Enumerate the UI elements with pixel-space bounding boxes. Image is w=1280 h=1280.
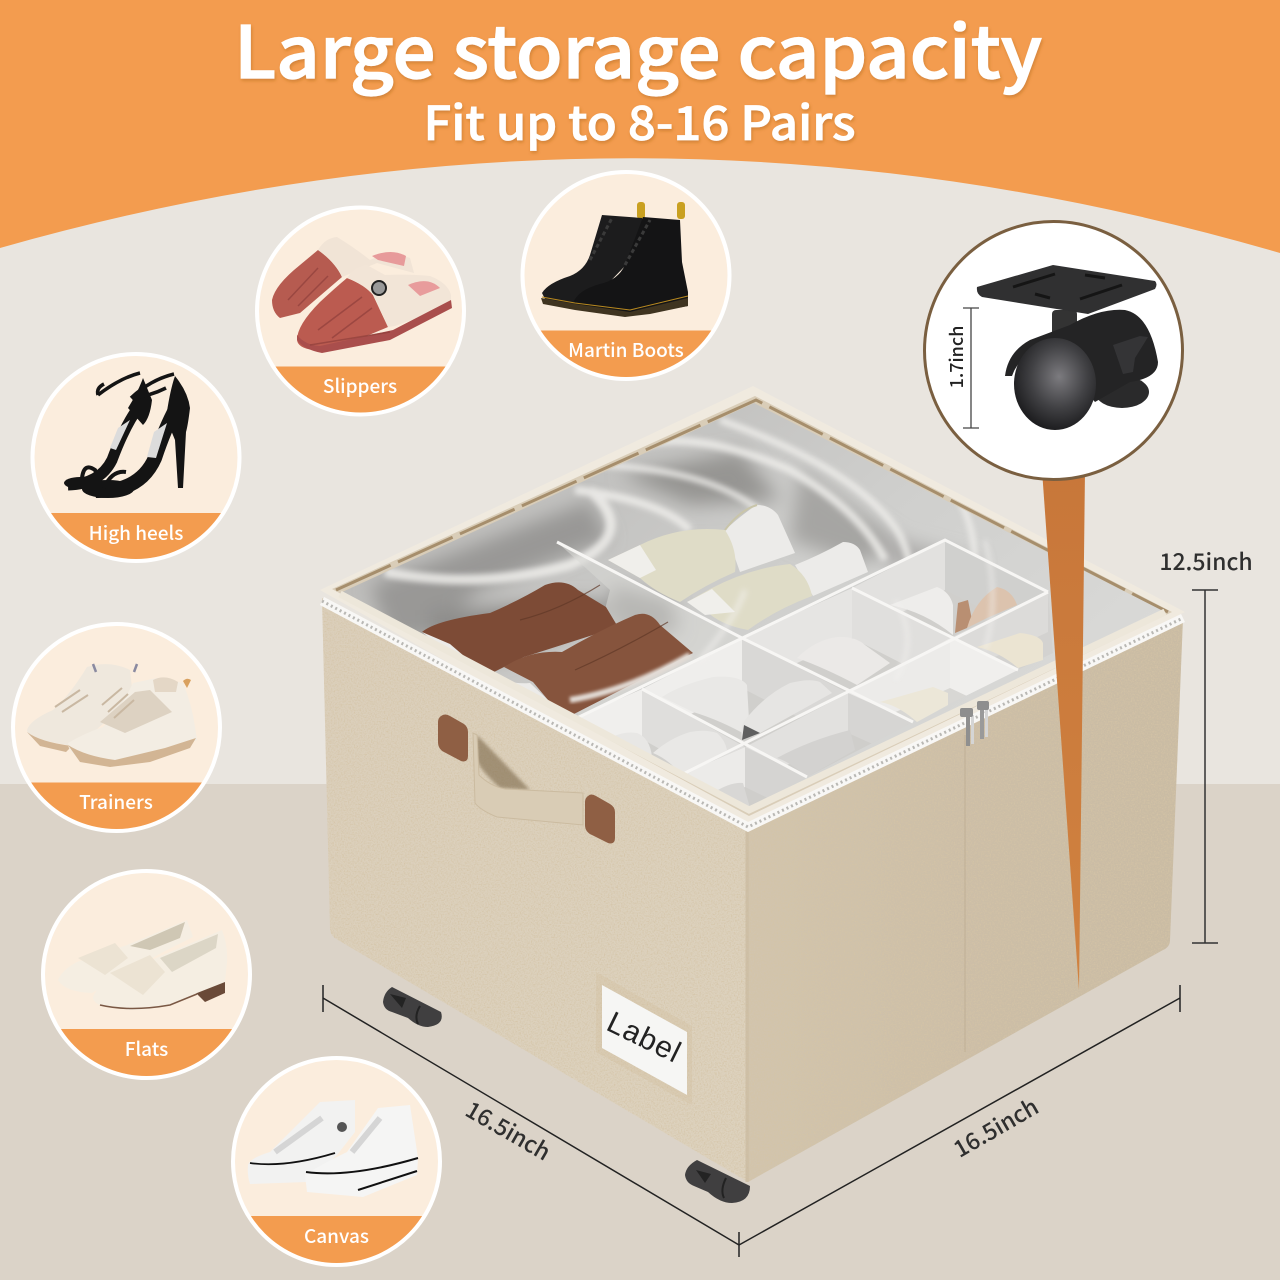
- mounting plate: [977, 265, 1156, 314]
- zipper: [322, 601, 1183, 827]
- caster wheel: [1014, 338, 1096, 430]
- canvas shoes illustration: [248, 1100, 418, 1197]
- boots illustration: [541, 202, 688, 317]
- high heels band: [51, 513, 221, 559]
- handle: [438, 714, 615, 843]
- lid frame: [320, 386, 1185, 832]
- caster brake: [1113, 336, 1148, 374]
- handle shadow: [477, 735, 530, 790]
- dimension: left width: [323, 985, 739, 1257]
- caster stem: [1052, 310, 1077, 336]
- corner seam: [746, 830, 748, 1182]
- heels illustration: [64, 373, 190, 498]
- interior film: [340, 403, 1165, 810]
- height text: 12.5inch: [1159, 543, 1253, 577]
- compartment: row A column 3: [854, 542, 979, 636]
- orange header banner: [0, 0, 1280, 253]
- storage box: [320, 386, 1185, 1203]
- compartment: row B column 3: [960, 632, 964, 634]
- shoes in small compartments: [612, 587, 1043, 808]
- right face seam: [964, 735, 966, 1052]
- compartment: row A column 1: [644, 640, 780, 714]
- dimension: height: [1159, 543, 1253, 943]
- rear wheel: [1095, 376, 1149, 408]
- compartment: row B column 2: [848, 638, 1016, 712]
- compartment: row B column 1: [746, 694, 870, 768]
- martin boots band: [540, 330, 712, 377]
- compartment: row B column 0: [688, 747, 745, 790]
- flats band: [61, 1029, 232, 1076]
- slippers label: Slippers: [323, 372, 397, 399]
- orange pointer from caster callout: [1042, 470, 1085, 990]
- canvas label: Canvas: [304, 1222, 369, 1249]
- compartment: row A column 0: [582, 689, 744, 760]
- martin boots label: Martin Boots: [568, 336, 684, 363]
- compartment divider lines: [557, 540, 1048, 777]
- slippers circle: [255, 208, 467, 426]
- flats circle: [41, 871, 253, 1089]
- lid rim front: [340, 594, 1165, 810]
- film light bands: [382, 416, 979, 588]
- flats illustration: [58, 920, 227, 1010]
- handle patch: right: [585, 794, 615, 843]
- subtitle: Fit up to 8-16 Pairs: [424, 85, 856, 154]
- trainers label: Trainers: [79, 788, 153, 815]
- brown boots: [422, 582, 693, 715]
- compartment: row A column 2: [746, 588, 950, 663]
- caster height dimension: [963, 308, 979, 428]
- handle strap: [473, 733, 583, 825]
- caster: left: [383, 987, 442, 1027]
- lid tan edge: [332, 396, 1172, 816]
- dimension: right width: [739, 985, 1180, 1245]
- caster height text: 1.7inch: [943, 326, 969, 388]
- martin boots circle: [520, 172, 732, 390]
- caster housing: [1005, 310, 1158, 402]
- trainers band: [31, 782, 202, 829]
- caster: front: [685, 1160, 750, 1203]
- box left face: [322, 598, 748, 1182]
- interior contents: [370, 420, 1053, 817]
- right width text: 16.5inch: [946, 1088, 1044, 1164]
- box right face: [748, 618, 1183, 1182]
- canvas band: [251, 1216, 422, 1263]
- film streaks over compartments: [700, 542, 996, 664]
- slippers band: [276, 366, 446, 412]
- label tape: Label: [602, 1006, 687, 1070]
- handle patch: left: [438, 714, 468, 761]
- cream shoes: [608, 505, 868, 630]
- lid tan stitching: [336, 400, 1168, 612]
- high heels circle: [30, 354, 242, 573]
- high heels label: High heels: [89, 519, 183, 546]
- trainers circle: [11, 624, 223, 842]
- film dark folds: [370, 450, 980, 660]
- slippers illustration: [272, 237, 452, 353]
- boots compartment wall: [562, 546, 692, 642]
- left width text: 16.5inch: [460, 1091, 558, 1167]
- label tape: [596, 972, 692, 1105]
- zipper pulls: [960, 701, 989, 746]
- canvas circle: [231, 1058, 443, 1276]
- flats label: Flats: [125, 1035, 168, 1062]
- trainers illustration: [27, 664, 197, 767]
- caster callout: [924, 222, 1182, 480]
